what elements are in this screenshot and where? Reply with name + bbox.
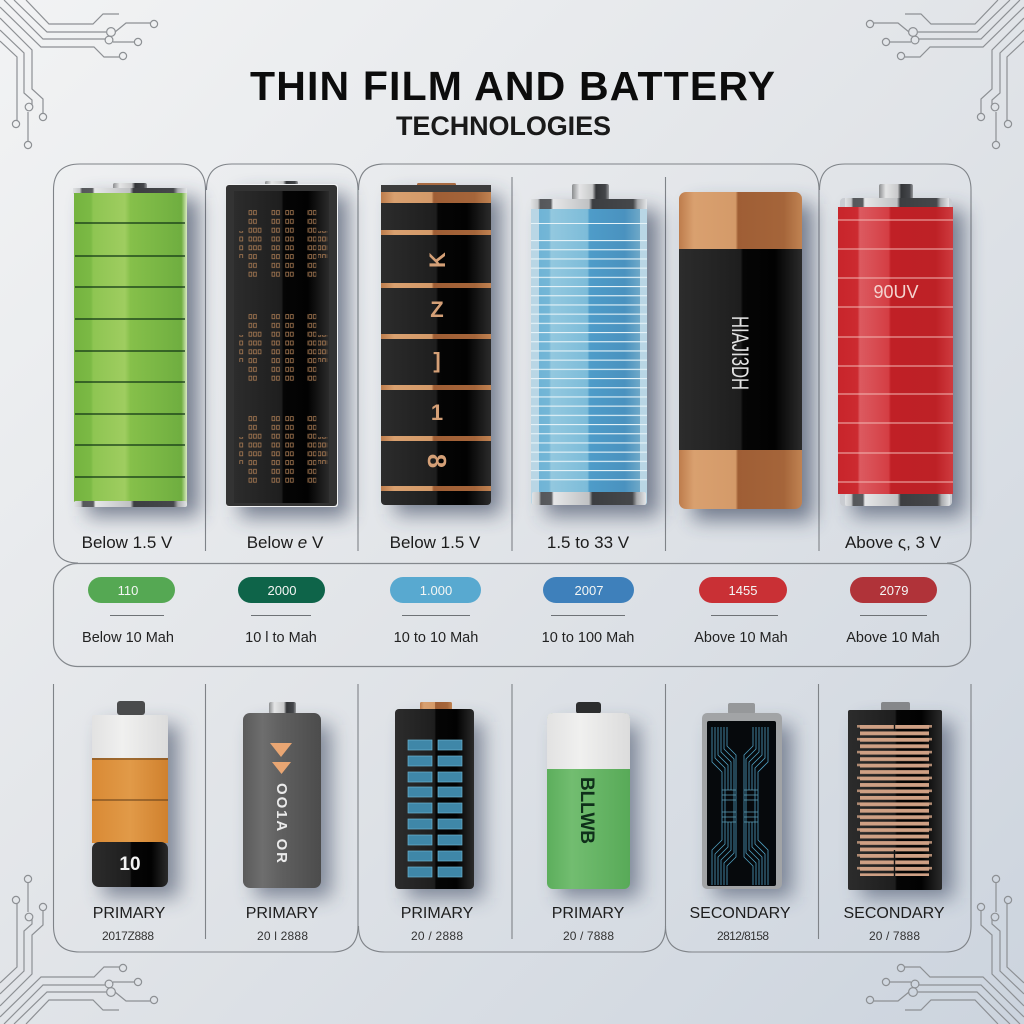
type codes <box>102 929 920 943</box>
type labels: SECONDARY <box>843 905 945 922</box>
battery: black chip-pattern cell <box>226 181 348 517</box>
battery: black cell with blue cells <box>395 702 483 898</box>
battery: metal cell with circuit traces <box>702 703 792 897</box>
copper micro-pattern blocks <box>239 209 327 485</box>
rotated marks: ] <box>433 348 441 373</box>
voltage labels: Below e V <box>247 533 324 552</box>
panel: capacity row <box>54 564 970 666</box>
layer lines <box>75 223 185 477</box>
type codes: 20 / 2888 <box>411 929 463 943</box>
circuit decoration: top left <box>0 0 158 149</box>
copper rings <box>381 192 491 491</box>
type codes: 20 / 7888 <box>869 929 920 943</box>
capacity labels: 10 to 10 Mah <box>394 630 478 646</box>
title: THIN FILM AND BATTERY <box>250 63 775 109</box>
circuit decoration: bottom right <box>866 875 1024 1024</box>
cap <box>113 183 147 190</box>
rotated marks <box>422 252 452 468</box>
white stripes <box>531 240 647 485</box>
type labels: PRIMARY <box>93 905 166 922</box>
vertical label: OO1A OR <box>273 783 290 863</box>
battery: copper and black cell <box>679 192 813 520</box>
type codes: 20 l 2888 <box>257 929 308 943</box>
rotated marks: Z <box>430 297 444 322</box>
battery: white and green cell <box>547 702 639 897</box>
capacity pills <box>88 577 937 603</box>
arrows <box>270 743 292 774</box>
copper coil <box>857 725 932 876</box>
type labels <box>93 905 945 922</box>
rotated marks: 8 <box>422 454 452 468</box>
battery: black cell with copper rings <box>381 183 501 514</box>
type codes: 2017Z888 <box>102 929 154 943</box>
red cell label: 90UV <box>873 282 919 302</box>
pill values: 2000 <box>268 583 296 598</box>
capacity labels: 10 l to Mah <box>245 630 317 646</box>
rotated marks: K <box>425 252 450 268</box>
circuit decoration: top right <box>866 0 1024 149</box>
capacity labels: Below 10 Mah <box>82 630 174 646</box>
battery: gray cell with arrows <box>243 702 331 897</box>
type labels: PRIMARY <box>246 905 319 922</box>
capacity labels: 10 to 100 Mah <box>542 630 634 646</box>
type labels: SECONDARY <box>689 905 791 922</box>
vertical label: HIAJI3DH <box>726 316 753 390</box>
circuit decoration: bottom left <box>0 875 158 1024</box>
voltage labels: Below 1.5 V <box>390 533 481 552</box>
subtitle: TECHNOLOGIES <box>396 111 611 141</box>
rotated marks: 1 <box>431 400 443 425</box>
pill values <box>118 583 908 598</box>
voltage labels: 1.5 to 33 V <box>547 533 630 552</box>
battery: red cell <box>838 184 964 516</box>
battery: green layered cell <box>73 183 199 516</box>
panel frames: voltage row <box>54 164 971 563</box>
type labels: PRIMARY <box>552 905 625 922</box>
capacity labels <box>82 630 940 646</box>
green body <box>74 193 187 502</box>
battery: white, orange and black cell <box>92 701 179 897</box>
pill values: 1455 <box>729 583 757 598</box>
capacity labels: Above 10 Mah <box>846 630 940 646</box>
type labels: PRIMARY <box>401 905 474 922</box>
pill values: 1.000 <box>420 583 452 598</box>
voltage labels <box>82 533 942 552</box>
blue cell grid <box>408 740 462 877</box>
capacity labels: Above 10 Mah <box>694 630 788 646</box>
voltage labels: Above ς, 3 V <box>845 533 942 552</box>
circuit traces <box>712 727 768 885</box>
type codes: 2812/8158 <box>717 929 769 943</box>
pill values: 110 <box>118 583 138 598</box>
pill values: 2079 <box>880 583 908 598</box>
battery: black cell with copper coil <box>848 702 953 898</box>
cell number: 10 <box>119 854 141 875</box>
pill values: 2007 <box>575 583 603 598</box>
red lines <box>838 220 953 482</box>
voltage labels: Below 1.5 V <box>82 533 173 552</box>
type codes: 20 / 7888 <box>563 929 614 943</box>
panel frames: type row <box>54 684 971 952</box>
vertical label: BLLWB <box>576 777 597 844</box>
battery: blue striped glass cell <box>531 184 659 516</box>
